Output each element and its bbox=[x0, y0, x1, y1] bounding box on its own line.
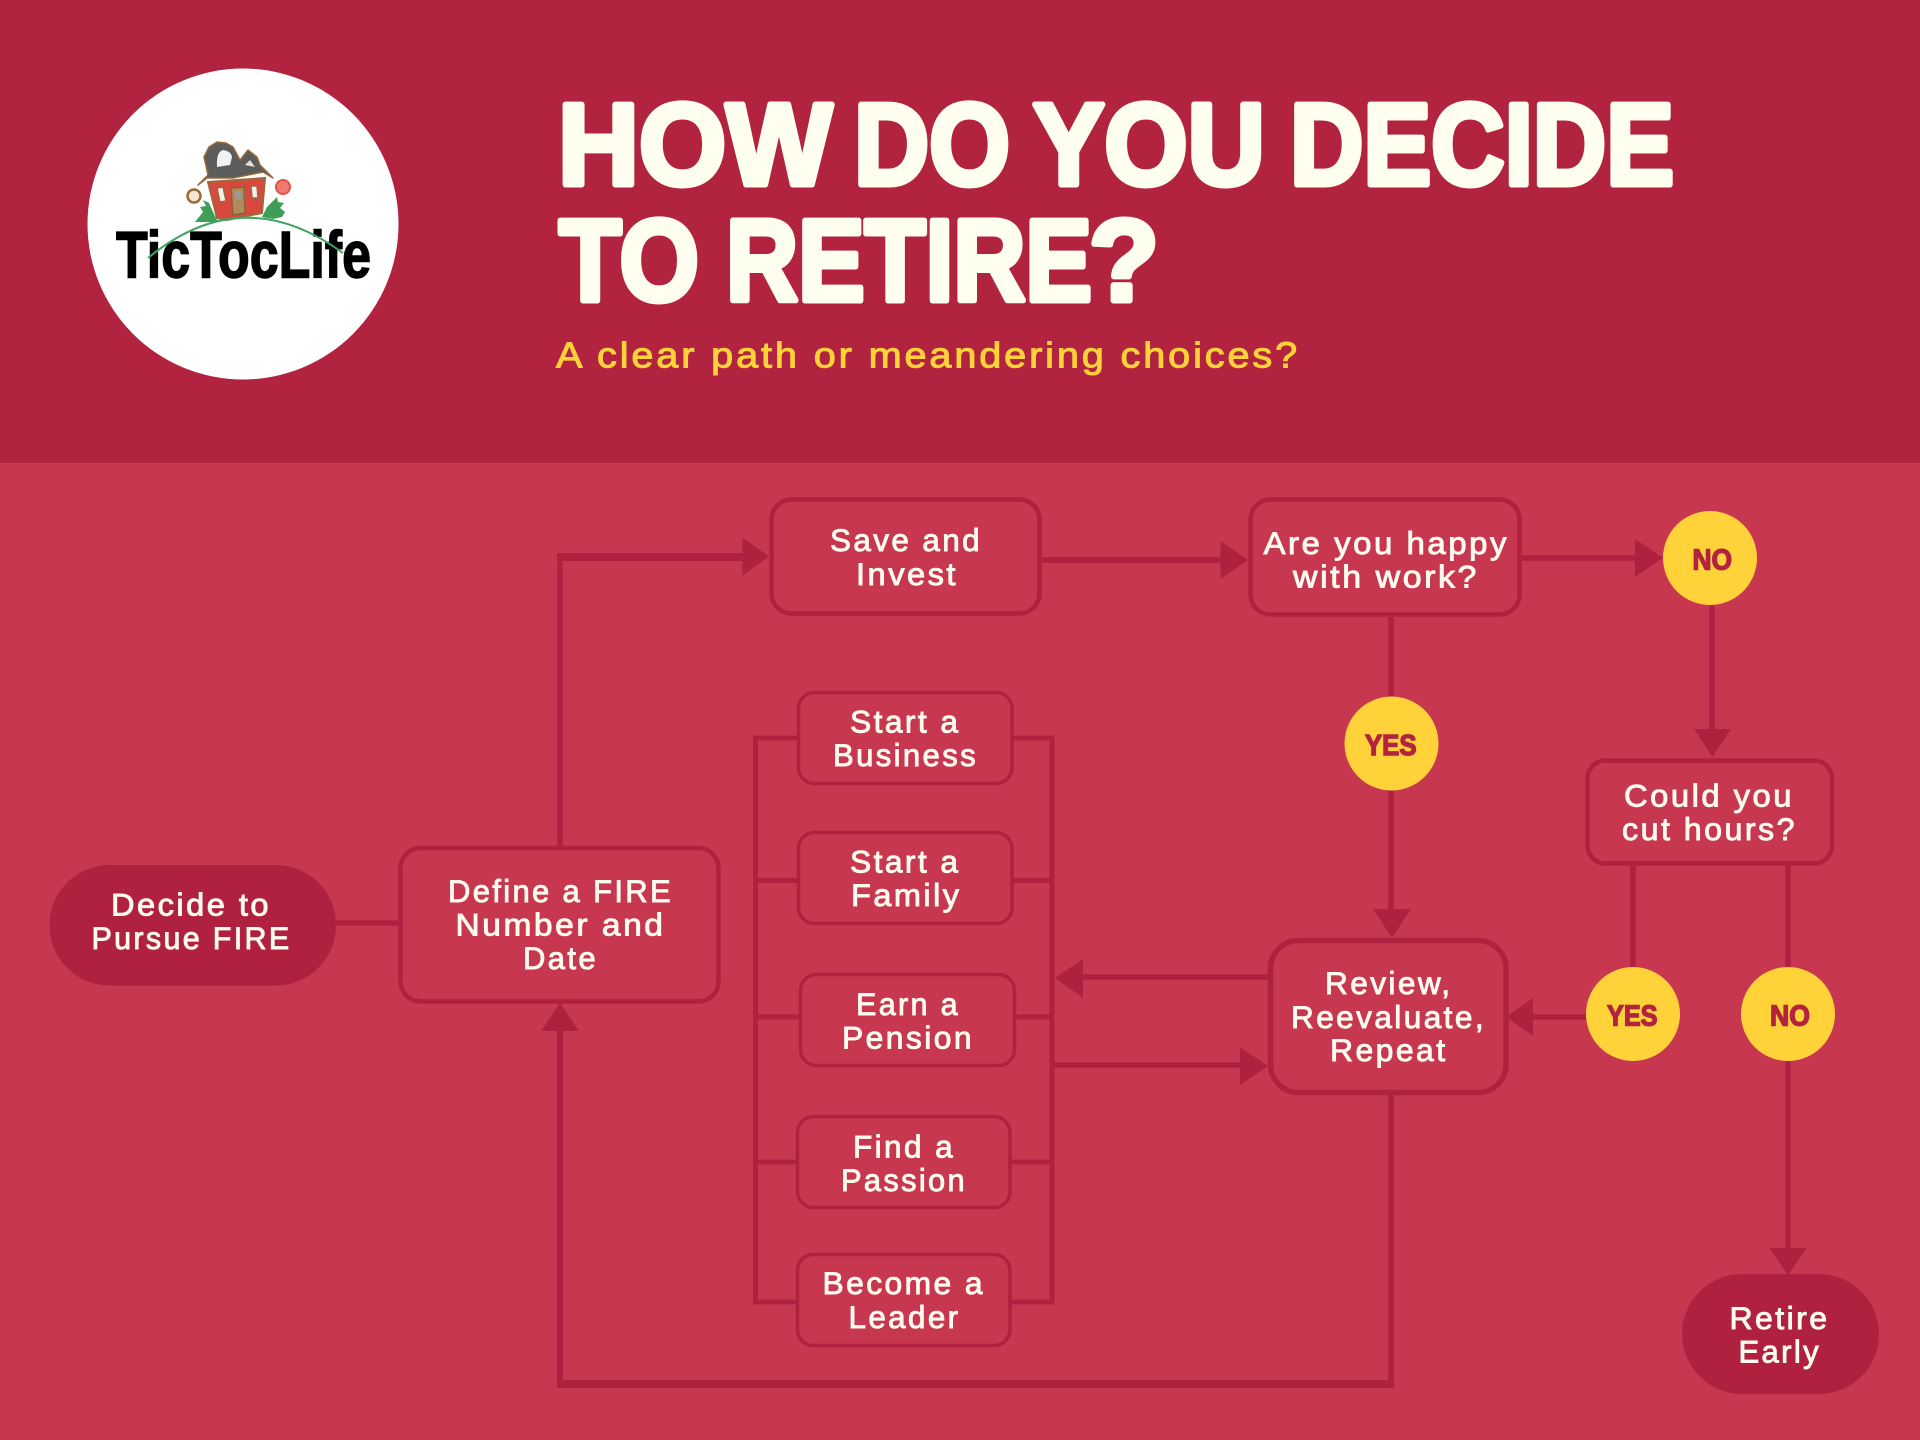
box: Save and Invest bbox=[772, 500, 1040, 614]
end node: Retire Early: Early bbox=[1738, 1334, 1821, 1370]
box: Are you happy with work?: with work? bbox=[1292, 558, 1479, 594]
logo wordmark: TicTocLife bbox=[116, 218, 371, 292]
icon: house with flowers bbox=[188, 142, 290, 222]
box: Could you cut hours?: cut hours? bbox=[1622, 811, 1797, 847]
option: Start a Business: Start a bbox=[850, 704, 960, 740]
option: Become a Leader: Leader bbox=[848, 1299, 960, 1335]
box: Define a FIRE Number and Date: Number and bbox=[456, 906, 666, 942]
subtitle: A clear path or meandering choices? bbox=[556, 334, 1300, 376]
option: Earn a Pension bbox=[800, 974, 1014, 1066]
option: Start a Family bbox=[798, 832, 1012, 924]
decision: NO: NO bbox=[1692, 544, 1732, 576]
option: Find a Passion: Passion bbox=[841, 1162, 967, 1198]
decision: YES (cut hours): YES bbox=[1607, 1000, 1658, 1032]
decision: NO (cut hours): NO bbox=[1770, 1000, 1810, 1032]
title: RETIRE bbox=[726, 196, 1092, 326]
title: ? bbox=[1089, 196, 1159, 326]
option: Earn a Pension: Pension bbox=[842, 1020, 974, 1056]
title: TO bbox=[559, 196, 699, 326]
option: Start a Family: Start a bbox=[850, 844, 960, 880]
connector lines bbox=[336, 557, 1788, 1388]
start node: Decide to Pursue FIRE: Pursue FIRE bbox=[92, 920, 292, 956]
start node: Decide to Pursue FIRE bbox=[50, 865, 336, 986]
decision: YES: YES bbox=[1365, 730, 1416, 762]
box: Are you happy with work?: Are you happy bbox=[1264, 525, 1509, 561]
arrow: to Could you cut hours bbox=[1694, 729, 1731, 757]
title: DECIDE bbox=[1290, 80, 1674, 210]
option: Start a Business: Business bbox=[833, 737, 978, 773]
arrow: to Are you happy bbox=[1220, 541, 1248, 579]
title bbox=[558, 80, 1674, 326]
flowchart panel bbox=[0, 463, 1920, 1440]
box: Define a FIRE Number and Date: Define a FIRE bbox=[448, 873, 673, 909]
box: Review, Reevaluate, Repeat bbox=[1270, 940, 1506, 1092]
logo hill arc bbox=[148, 218, 343, 258]
option: Become a Leader bbox=[798, 1254, 1010, 1346]
option: Become a Leader: Become a bbox=[822, 1265, 985, 1301]
arrow: to Save and Invest bbox=[742, 538, 769, 576]
decision: NO bbox=[1663, 511, 1757, 605]
end node: Retire Early: Retire bbox=[1730, 1300, 1830, 1336]
option: Find a Passion bbox=[798, 1116, 1010, 1208]
header panel bbox=[0, 0, 1920, 463]
option: Earn a Pension: Earn a bbox=[856, 986, 960, 1022]
decision: YES bbox=[1344, 696, 1438, 790]
title: DO bbox=[854, 80, 1010, 210]
box: Are you happy with work? bbox=[1250, 500, 1520, 614]
box: Review, Reevaluate, Repeat: Reevaluate, bbox=[1291, 999, 1486, 1035]
arrow: options to Review bbox=[1240, 1047, 1268, 1085]
arrow: to NO bbox=[1635, 539, 1663, 577]
arrow: YES to Review bbox=[1506, 998, 1533, 1036]
decision: YES (cut hours) bbox=[1586, 967, 1680, 1061]
title: YOU bbox=[1033, 80, 1265, 210]
arrow: to Retire Early bbox=[1769, 1248, 1807, 1275]
box: Could you cut hours?: Could you bbox=[1624, 778, 1794, 814]
option: Find a Passion: Find a bbox=[853, 1128, 955, 1164]
box: Define a FIRE Number and Date: Date bbox=[523, 940, 598, 976]
arrow: to Review bbox=[1373, 909, 1411, 938]
arrow: up to Define bbox=[541, 1003, 579, 1031]
decision: NO (cut hours) bbox=[1741, 967, 1835, 1061]
start node: Decide to Pursue FIRE: Decide to bbox=[111, 886, 271, 922]
end node: Retire Early bbox=[1682, 1274, 1879, 1394]
box: Could you cut hours? bbox=[1588, 760, 1832, 864]
box: Review, Reevaluate, Repeat: Repeat bbox=[1330, 1032, 1448, 1068]
option: Start a Business bbox=[798, 692, 1012, 784]
option: Start a Family: Family bbox=[851, 877, 962, 913]
box: Save and Invest: Save and bbox=[830, 522, 982, 558]
box: Define a FIRE Number and Date bbox=[400, 848, 718, 1002]
logo: TicTocLife bbox=[88, 68, 398, 380]
box: Save and Invest: Invest bbox=[856, 556, 958, 592]
title: HOW bbox=[558, 80, 832, 210]
arrow: Review back to options bbox=[1055, 959, 1083, 998]
box: Review, Reevaluate, Repeat: Review, bbox=[1325, 965, 1452, 1001]
